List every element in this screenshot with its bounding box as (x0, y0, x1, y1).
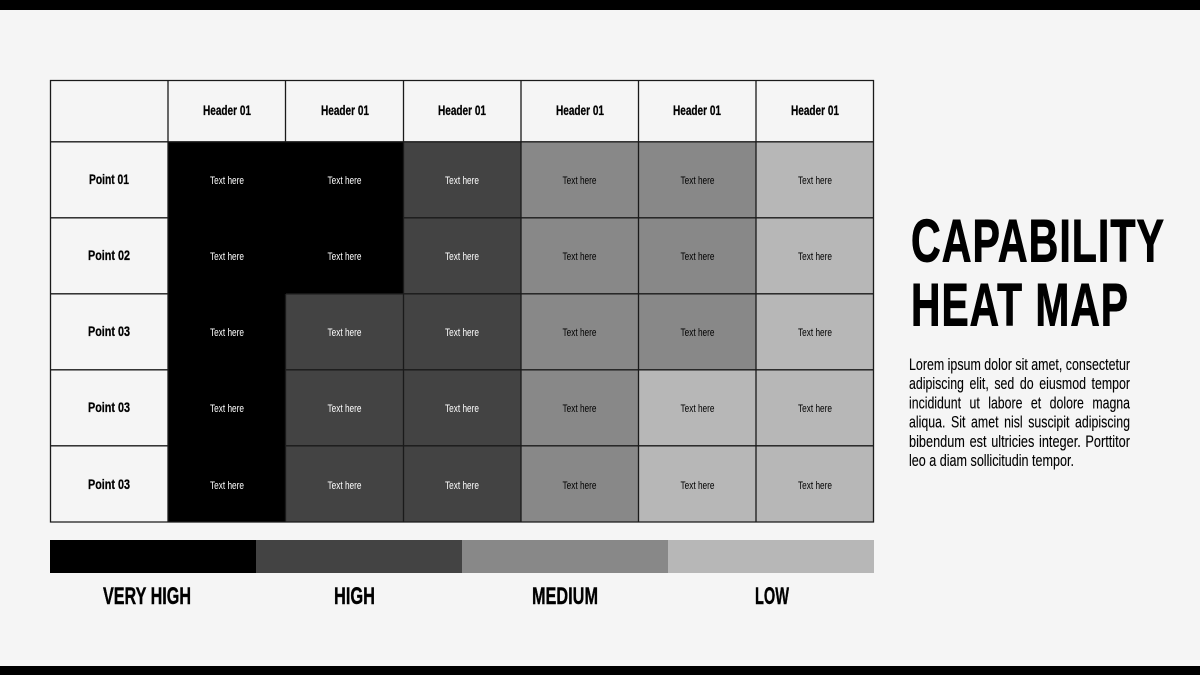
legend: medium: MEDIUM (532, 583, 598, 610)
heat cells: row 4: Text here (798, 403, 832, 415)
legend: low (668, 540, 874, 610)
heat cells: row 1: Text here (798, 175, 832, 187)
heat cells: row 2: Text here (445, 251, 479, 263)
row labels: Point 03 (88, 324, 130, 339)
heat cells: row 2: Text here (798, 251, 832, 263)
heat cells: row 1: Text here (562, 175, 596, 187)
heat cells: row 5: Text here (798, 480, 832, 492)
heat cells: row 1: Text here (328, 175, 362, 187)
heat cells: row 2: Text here (328, 251, 362, 263)
column headers: Header 01 (321, 103, 369, 118)
title (911, 208, 1165, 338)
legend (50, 540, 874, 610)
heat cells: row 1: Text here (680, 175, 714, 187)
column headers: Header 01 (556, 103, 604, 118)
column headers: Header 01 (438, 103, 486, 118)
row labels: Point 01 (89, 172, 129, 187)
heat cells: row 4: Text here (562, 403, 596, 415)
heat cells: row 3: Text here (445, 327, 479, 339)
legend: medium (462, 540, 668, 610)
legend: very high: VERY HIGH (103, 583, 191, 610)
heat cells: row 5: Text here (445, 480, 479, 492)
heat cells: row 5 (168, 446, 874, 522)
heat cells: row 4: Text here (445, 403, 479, 415)
column headers: Header 01 (203, 103, 251, 118)
heat cells: row 5: Text here (210, 480, 244, 492)
heat cells: row 5: Text here (328, 480, 362, 492)
legend: low: LOW (755, 583, 790, 610)
heat cells: row 1 (168, 142, 874, 218)
heat cells: row 3: Text here (680, 327, 714, 339)
row labels: Point 03 (88, 400, 130, 415)
row labels (88, 172, 130, 492)
heat cells: row 4: Text here (210, 403, 244, 415)
heat cells: row 1: Text here (210, 175, 244, 187)
heat cells: row 5: Text here (680, 480, 714, 492)
legend: high (256, 540, 462, 610)
heat cells: row 2: Text here (210, 251, 244, 263)
column headers: Header 01 (791, 103, 839, 118)
heat cells: row 4: Text here (328, 403, 362, 415)
heat cells: row 3: Text here (328, 327, 362, 339)
column headers (203, 103, 839, 118)
row labels: Point 03 (88, 477, 130, 492)
heat cells: row 1: Text here (445, 175, 479, 187)
legend: high: HIGH (334, 583, 375, 610)
description text (909, 355, 1130, 470)
legend: very high (50, 540, 256, 610)
heat cells: row 3: Text here (210, 327, 244, 339)
heat cells: row 2: Text here (562, 251, 596, 263)
column headers: Header 01 (673, 103, 721, 118)
heat cells: row 3: Text here (562, 327, 596, 339)
heat cells: row 4: Text here (680, 403, 714, 415)
heat cells: row 5: Text here (562, 480, 596, 492)
row labels: Point 02 (88, 248, 130, 263)
description text: leo a diam sollicitudin tempor. (909, 451, 1074, 470)
heat cells: row 2 (168, 218, 874, 294)
heat map table (50, 80, 874, 522)
description text: bibendum est ultricies integer. Porttitor (909, 432, 1130, 451)
heat cells: row 3: Text here (798, 327, 832, 339)
heat cells: row 2: Text here (680, 251, 714, 263)
heat cells: row 4 (168, 370, 874, 446)
heat cells: row 3 (168, 294, 874, 370)
